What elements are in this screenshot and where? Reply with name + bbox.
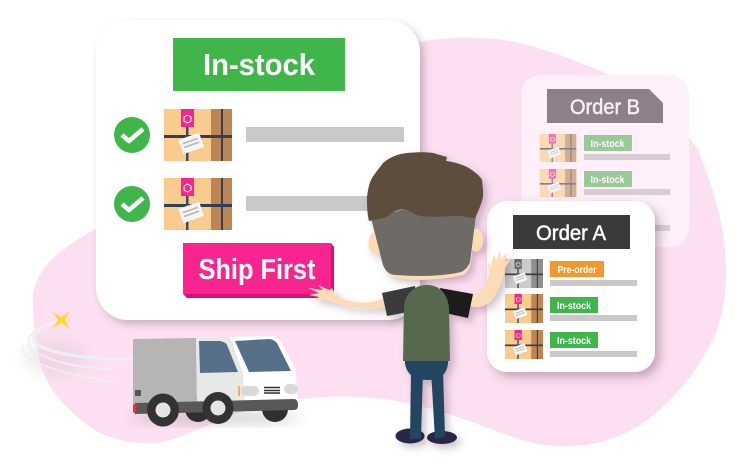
far wheels — [185, 396, 288, 422]
delivery truck — [130, 336, 300, 426]
right sleeve — [440, 288, 473, 318]
Order B heading: Order B — [570, 95, 640, 119]
panel: Order B — [521, 75, 689, 247]
neck and jaw — [381, 230, 474, 280]
windshield — [235, 339, 291, 372]
icon: parcel 1 — [164, 109, 232, 161]
ears — [368, 228, 484, 254]
Order A row 1: pre-order — [505, 259, 637, 288]
Ship First button: Ship First — [198, 254, 316, 286]
hair — [367, 152, 483, 221]
Order B row 1 — [540, 134, 670, 162]
Order A row 3: in-stock — [505, 330, 637, 359]
Order A row 3: in-stock: In-stock — [557, 336, 591, 347]
icon: check 1 — [114, 117, 150, 153]
legs — [405, 358, 448, 439]
Order A row 2: in-stock: In-stock — [557, 301, 591, 312]
text placeholder bar 2 — [246, 196, 404, 211]
Order A row 2: in-stock — [505, 294, 637, 323]
Order B row 3 bar — [584, 225, 670, 231]
head back — [371, 205, 476, 276]
right arm and hand — [470, 250, 511, 307]
Order B heading — [547, 89, 663, 123]
left sleeve — [382, 286, 418, 316]
In-stock heading — [173, 38, 345, 91]
Order A heading: Order A — [536, 221, 607, 245]
Order B row 2 — [540, 169, 670, 197]
left arm and hand — [308, 285, 386, 308]
Order A row 1: pre-order: Pre-order — [558, 265, 597, 276]
cab side — [196, 337, 248, 408]
panel: Order A — [487, 201, 655, 372]
Order B row 2: In-stock — [590, 175, 625, 186]
person seen from behind — [308, 152, 511, 444]
lights and grille — [133, 384, 298, 413]
icon: parcel 2 — [164, 178, 232, 230]
Order A heading — [513, 215, 630, 249]
Ship First button — [183, 243, 334, 298]
chassis bar — [135, 399, 298, 414]
panel: In-stock card — [96, 20, 420, 320]
cargo box — [133, 338, 197, 404]
truck shadow — [130, 412, 300, 424]
cab front — [230, 336, 297, 408]
near wheels — [147, 392, 234, 426]
torso — [403, 285, 450, 361]
text placeholder bar 1 — [246, 127, 404, 142]
speed swoosh lines — [22, 322, 132, 382]
Order B row 1: In-stock — [590, 139, 625, 150]
In-stock heading: In-stock — [203, 47, 316, 82]
icon: check 2 — [114, 186, 150, 222]
shoes — [396, 428, 457, 444]
icon: yellow star — [52, 311, 70, 329]
side window — [199, 341, 238, 373]
